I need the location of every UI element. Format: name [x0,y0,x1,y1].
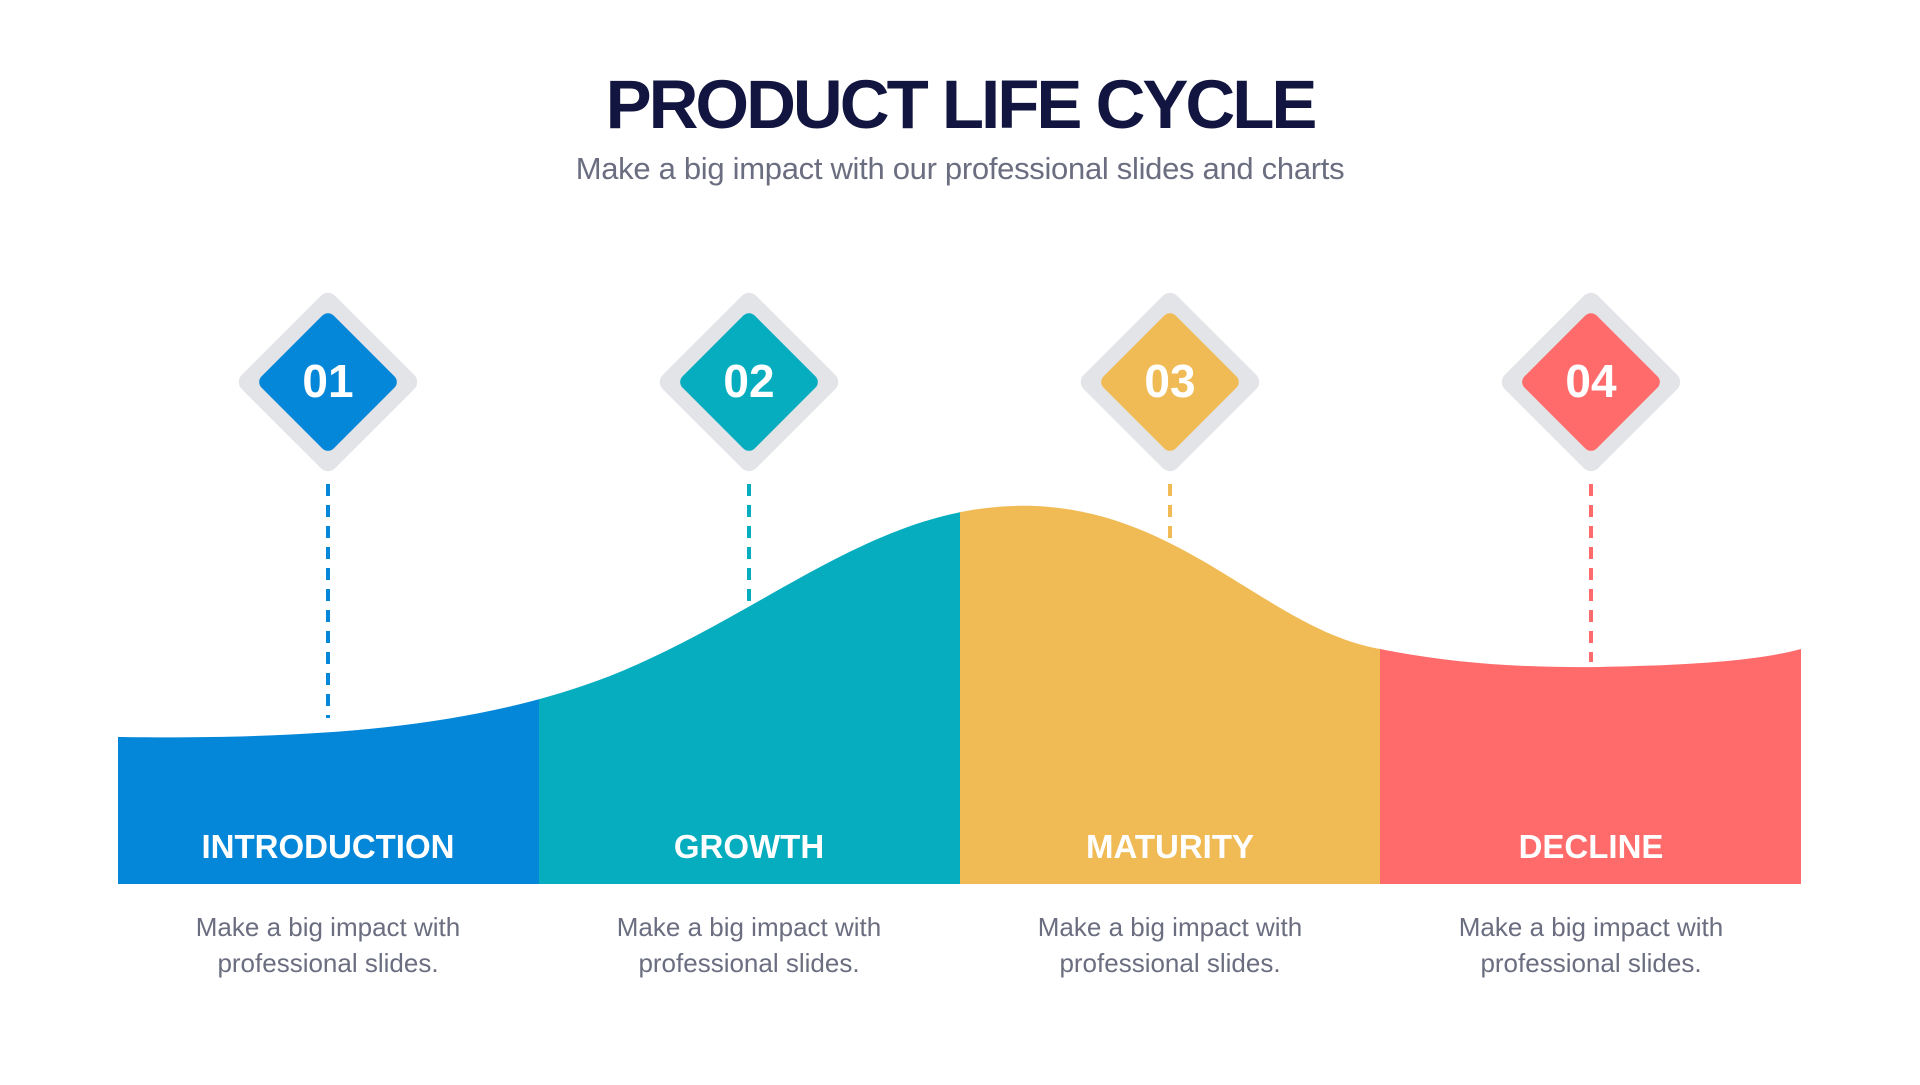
stage 4: 04 [1565,355,1617,407]
stage 3: 03 [1144,355,1196,407]
chart: life cycle curve [118,506,1801,884]
stage 2: Make a big impact with [617,912,881,942]
stage 2: 02 [723,355,775,407]
stage 4: DECLINE [1519,828,1663,865]
stage 2: GROWTH [674,828,824,865]
stage 3: MATURITY [1086,828,1254,865]
stage 3 [1038,289,1302,978]
stage 2 [617,289,881,978]
stage 2: professional slides. [638,948,860,978]
title: PRODUCT LIFE CYCLE [606,66,1315,143]
stage 1: Make a big impact with [196,912,460,942]
stage 1: professional slides. [217,948,439,978]
stage 3: Make a big impact with [1038,912,1302,942]
stage 3: professional slides. [1059,948,1281,978]
stage 4 [1459,289,1723,978]
stage 4: Make a big impact with [1459,912,1723,942]
stage 1: INTRODUCTION [202,828,454,865]
stage 4: professional slides. [1480,948,1702,978]
subtitle: Make a big impact with our professional slides and charts [576,151,1344,186]
stage 1 [196,289,460,978]
stage 1: 01 [302,355,354,407]
